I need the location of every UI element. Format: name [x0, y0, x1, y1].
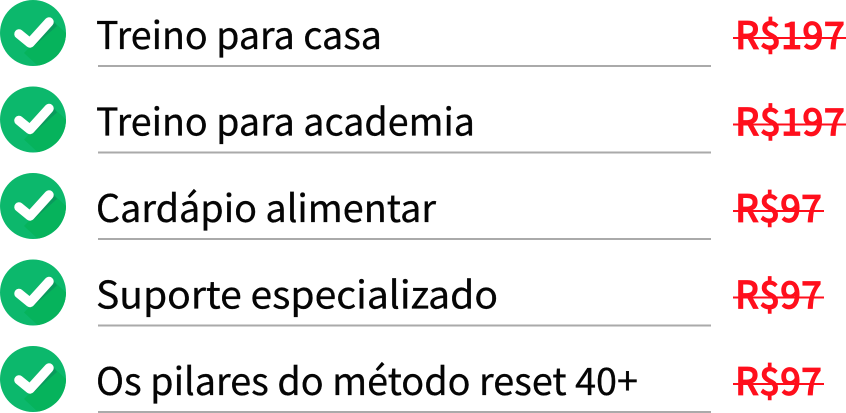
price: R$97 [735, 351, 822, 406]
label: Treino para academia [96, 92, 475, 146]
label: Os pilares do método reset 40+ [96, 351, 638, 406]
label: Suporte especializado [96, 264, 498, 320]
price: R$97 [735, 264, 822, 320]
price: R$97 [735, 178, 822, 233]
icon: check badge [0, 0, 66, 66]
row 4: Suporte especializado [0, 260, 824, 326]
price: R$197 [735, 5, 845, 60]
divider [98, 152, 711, 154]
icon: check badge [0, 260, 66, 326]
label: Cardápio alimentar [96, 178, 436, 233]
row 5: Os pilares do método reset 40+ [0, 346, 824, 413]
price: R$197 [735, 92, 845, 146]
divider [98, 238, 711, 240]
row 3: Cardápio alimentar [0, 173, 824, 240]
divider [98, 411, 711, 413]
icon: check badge [0, 173, 66, 239]
divider [98, 65, 711, 67]
icon: check badge [0, 346, 66, 412]
label: Treino para casa [96, 5, 382, 60]
row 2: Treino para academia [0, 86, 846, 154]
divider [98, 324, 711, 326]
icon: check badge [0, 86, 66, 152]
row 1: Treino para casa [0, 0, 846, 67]
